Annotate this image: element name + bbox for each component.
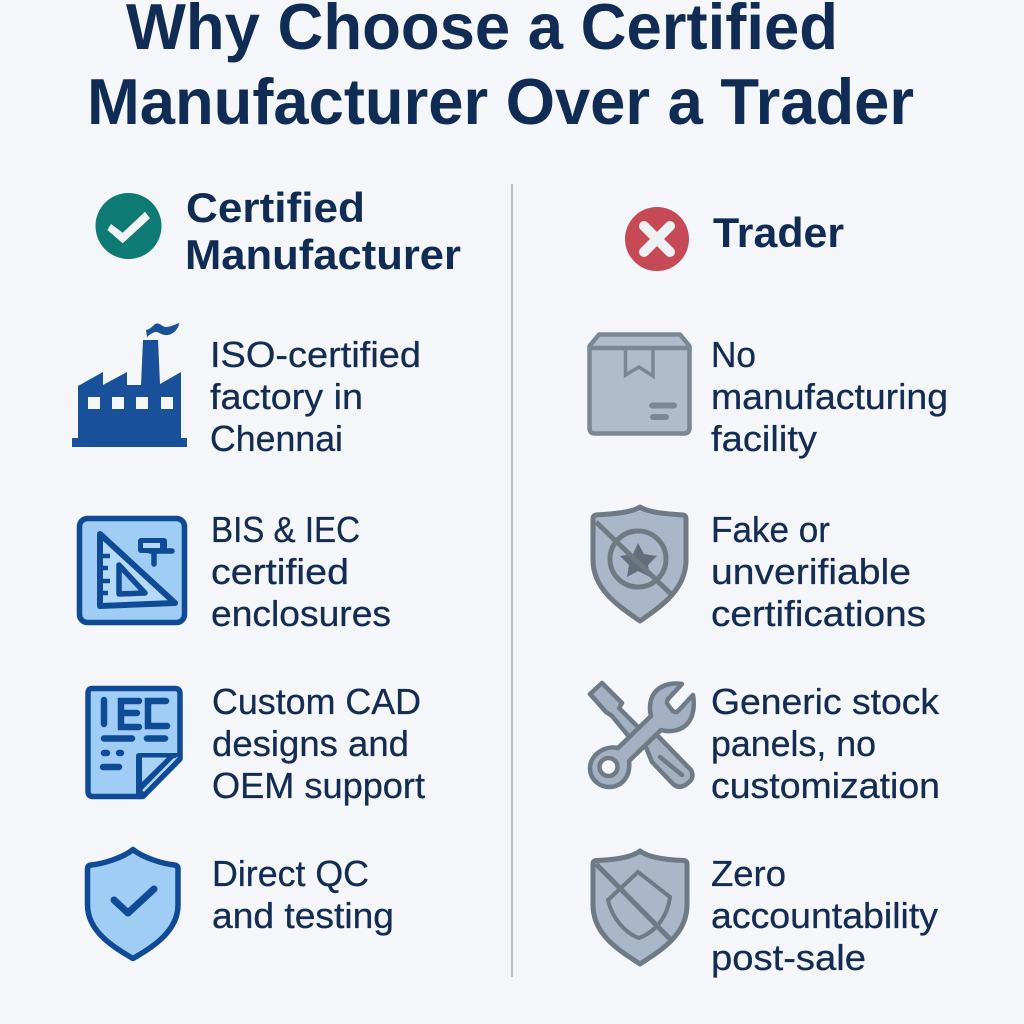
- icon: green check badge: [96, 193, 162, 259]
- text: custom CAD: OEM support: [212, 765, 425, 806]
- text: generic stock panels: panels, no: [711, 723, 876, 764]
- text: no manufacturing facility: No: [711, 334, 756, 375]
- panel: certified manufacturer: [72, 184, 461, 958]
- icon: IEC document: [88, 688, 180, 797]
- text: direct QC: Direct QC: [212, 853, 369, 894]
- text: direct QC: [212, 853, 394, 936]
- text: direct QC: and testing: [212, 895, 394, 936]
- text: zero accountability: [711, 853, 938, 978]
- text: BIS and IEC: BIS & IEC: [211, 509, 360, 550]
- icon: crossed wrench and screwdriver: [590, 683, 694, 787]
- icon: blue shield check: [88, 850, 178, 958]
- text: fake certifications: certifications: [711, 593, 926, 634]
- text: BIS and IEC: [211, 509, 391, 634]
- text: generic stock panels: Generic stock: [711, 681, 940, 722]
- text: fake certifications: Fake or: [711, 509, 830, 550]
- text: custom CAD: designs and: [212, 723, 409, 764]
- text: ISO-certified factory: ISO-certified: [210, 334, 421, 375]
- heading: certified manufacturer: Manufacturer: [185, 231, 461, 278]
- text: fake certifications: unverifiable: [711, 551, 911, 592]
- text: no manufacturing facility: manufacturing: [711, 376, 948, 417]
- icon: red cross badge: [625, 207, 689, 271]
- text: no manufacturing facility: [711, 334, 948, 459]
- text: BIS and IEC: enclosures: [211, 593, 391, 634]
- text: no manufacturing facility: facility: [711, 418, 817, 459]
- panel: trader: [589, 207, 948, 978]
- text: ISO-certified factory: [210, 334, 421, 459]
- text: custom CAD: Custom CAD: [212, 681, 421, 722]
- text: generic stock panels: customization: [711, 765, 940, 806]
- icon: cardboard box: [589, 334, 690, 434]
- text: custom CAD: [212, 681, 425, 806]
- icon: shield with crossed star: [593, 507, 686, 621]
- text: zero accountability: accountability: [711, 895, 938, 936]
- icon: shield with crossed inner shield: [593, 851, 687, 964]
- icon: set square: [80, 518, 184, 622]
- text: zero accountability: Zero: [711, 853, 786, 894]
- title: Manufacturer Over a Trader: [87, 65, 914, 138]
- icon: factory: [72, 323, 187, 447]
- title: [87, 0, 914, 138]
- heading: certified manufacturer: [185, 184, 461, 278]
- text: ISO-certified factory: factory in: [210, 376, 363, 417]
- text: zero accountability: post-sale: [711, 937, 866, 978]
- text: BIS and IEC: certified: [211, 551, 349, 592]
- heading: trader: Trader: [713, 209, 844, 256]
- text: fake certifications: [711, 509, 926, 634]
- text: generic stock panels: [711, 681, 940, 806]
- heading: certified manufacturer: Certified: [186, 184, 365, 231]
- text: ISO-certified factory: Chennai: [210, 418, 343, 459]
